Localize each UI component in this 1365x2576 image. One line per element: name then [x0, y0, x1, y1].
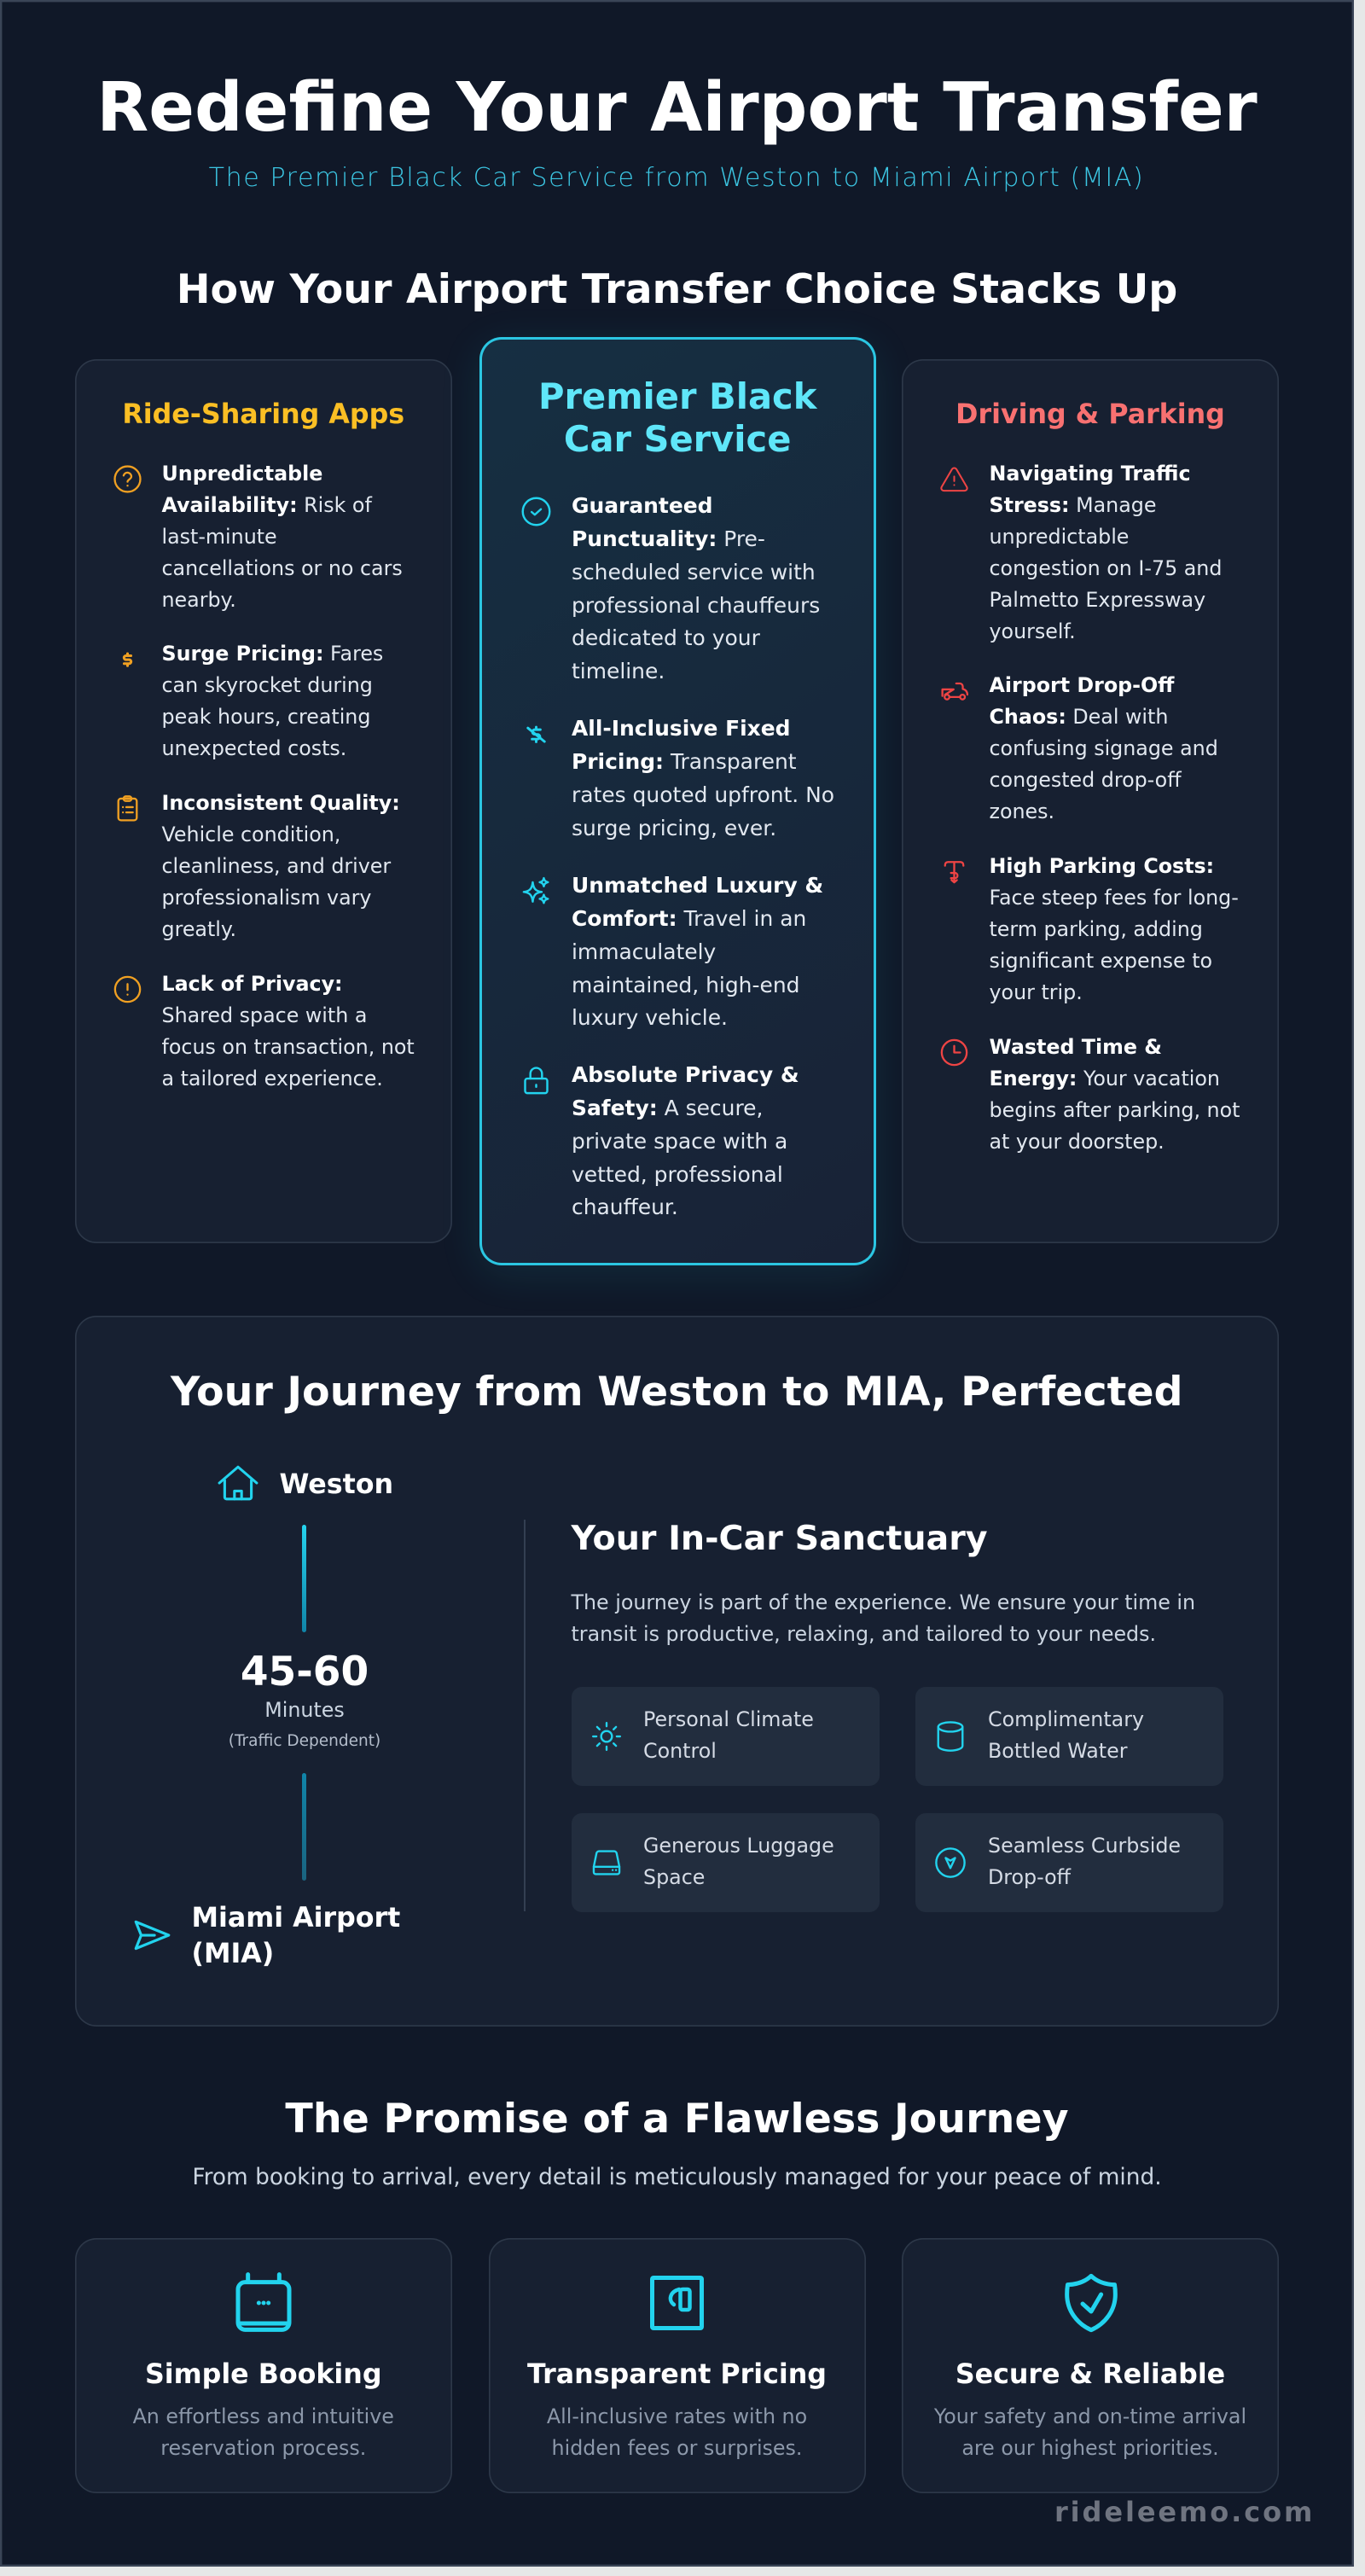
- text: secure and reliable: Your safety and on-time arrival: [934, 2404, 1246, 2428]
- text: guaranteed punctuality: timeline.: [572, 659, 665, 683]
- icon: lock: [524, 1067, 549, 1094]
- text: secure and reliable: are our highest priorities.: [961, 2436, 1219, 2460]
- text: high parking costs: term parking, adding: [990, 917, 1203, 941]
- text: all-inclusive fixed pricing: surge pricing, ever.: [572, 816, 776, 840]
- icon: parking cost sign: [944, 861, 964, 884]
- panel: driving and parking: [902, 359, 1279, 1243]
- text: unmatched luxury: [572, 873, 823, 1030]
- text: unpredictable availability: Unpredictable: [162, 462, 322, 486]
- heading: comparison: How Your Airport Transfer Choice Stacks Up: [177, 266, 1177, 313]
- text: wasted time and energy: Wasted Time &: [990, 1035, 1162, 1059]
- text: simple booking: An effortless and intuitive: [133, 2404, 394, 2428]
- text: navigating traffic stress: yourself.: [990, 619, 1076, 643]
- icon: paper plane: [130, 1914, 172, 1957]
- text: unmatched luxury: maintained, high-end: [572, 973, 799, 997]
- text: wasted time and energy: [990, 1035, 1240, 1154]
- icon: calendar: [229, 2269, 298, 2337]
- card: secure and reliable: [902, 2238, 1279, 2493]
- icon: clock: [940, 1039, 967, 1067]
- text: airport drop-off chaos: Airport Drop-Off: [990, 673, 1174, 697]
- text: unpredictable availability: nearby.: [162, 588, 236, 612]
- text: bottled water: Complimentary: [988, 1707, 1144, 1731]
- panel: journey: [75, 1316, 1279, 2026]
- feature: climate control: [572, 1687, 880, 1786]
- text: absolute privacy: private space with a: [572, 1129, 787, 1154]
- text: all-inclusive fixed pricing: Pricing: Transparent: [572, 749, 797, 774]
- text: absolute privacy: Absolute Privacy &: [572, 1062, 799, 1087]
- icon: slashed dollar: [526, 725, 546, 743]
- panel: premier black car service: [479, 337, 876, 1265]
- text: unmatched luxury: luxury vehicle.: [572, 1005, 728, 1030]
- text: airport drop-off chaos: zones.: [990, 800, 1054, 823]
- title: transparent pricing: Transparent Pricing: [527, 2359, 827, 2390]
- text: inconsistent quality: cleanliness, and driver: [162, 854, 391, 878]
- text: guaranteed punctuality: [572, 493, 820, 683]
- line: route upper: [302, 1525, 306, 1632]
- text: unpredictable availability: last-minute: [162, 525, 277, 549]
- text: guaranteed punctuality: scheduled service with: [572, 560, 816, 584]
- card: transparent pricing: [488, 2238, 865, 2493]
- text: luggage space: Space: [643, 1865, 705, 1889]
- text: unmatched luxury: Comfort: Travel in an: [572, 906, 806, 931]
- icon: tablet with mug: [643, 2269, 712, 2337]
- text: luggage space: Generous Luggage: [643, 1834, 834, 1858]
- text: airport drop-off chaos: Chaos: Deal with: [990, 705, 1168, 729]
- icon: sun: [590, 1720, 623, 1753]
- text: climate control: Control: [643, 1739, 717, 1763]
- route timeline: [135, 1466, 400, 1969]
- item: inconsistent quality: [118, 791, 400, 941]
- text: lack of privacy: [162, 972, 415, 1090]
- item: surge pricing: [123, 642, 383, 760]
- text: guaranteed punctuality: Guaranteed: [572, 493, 713, 518]
- text: lack of privacy: Shared space with a: [162, 1003, 367, 1027]
- label: Miami Airport: [191, 1900, 400, 1972]
- note: traffic dependent: (Traffic Dependent): [229, 1732, 380, 1750]
- feature: curbside drop-off: [915, 1813, 1223, 1912]
- line: route lower: [302, 1773, 306, 1881]
- text: unpredictable availability: [162, 462, 403, 612]
- text: airport drop-off chaos: congested drop-off: [990, 768, 1182, 792]
- text: simple booking: reservation process.: [160, 2436, 366, 2460]
- text: absolute privacy: Safety: A secure,: [572, 1096, 763, 1120]
- item: airport drop-off chaos: [941, 673, 1218, 823]
- title: Redefine Your Airport Transfer: [96, 67, 1258, 147]
- text: absolute privacy: chauffeur.: [572, 1195, 678, 1219]
- heading: journey: Your Journey from Weston to MIA, Perfected: [171, 1369, 1183, 1416]
- feature: bottled water: [915, 1687, 1223, 1786]
- text: airport drop-off chaos: [990, 673, 1218, 823]
- panel: ride-sharing apps: [75, 359, 452, 1243]
- text: inconsistent quality: Inconsistent Quality:: [162, 791, 400, 815]
- item: navigating traffic stress: [940, 462, 1222, 643]
- item: unmatched luxury: [522, 873, 823, 1030]
- text: all-inclusive fixed pricing: [572, 716, 834, 840]
- text: unpredictable availability: cancellations or no cars: [162, 556, 403, 580]
- text: in-car intro: The journey is part of the experience. We ensure your time in: [572, 1590, 1195, 1614]
- label: minutes: Minutes: [264, 1698, 345, 1722]
- heading: ride-sharing apps: Ride-Sharing Apps: [122, 399, 404, 430]
- card: simple booking: [75, 2238, 452, 2493]
- text: surge pricing: Surge Pricing: Fares: [162, 642, 383, 666]
- text: navigating traffic stress: Palmetto Expressway: [990, 588, 1205, 612]
- text: lack of privacy: a tailored experience.: [162, 1067, 383, 1090]
- item: guaranteed punctuality: [522, 493, 820, 683]
- text: bottled water: Bottled Water: [988, 1739, 1128, 1763]
- text: guaranteed punctuality: professional chauffeurs: [572, 593, 820, 618]
- text: absolute privacy: vetted, professional: [572, 1162, 783, 1187]
- text: bottled water: [988, 1704, 1144, 1767]
- text: guaranteed punctuality: dedicated to your: [572, 625, 760, 650]
- icon: storage drive: [590, 1846, 623, 1879]
- text: navigating traffic stress: unpredictable: [990, 525, 1129, 549]
- text: high parking costs: [990, 854, 1239, 1004]
- icon: cylinder: [934, 1720, 967, 1753]
- icon: clipboard: [118, 795, 138, 821]
- text: inconsistent quality: professionalism vary: [162, 886, 372, 910]
- heading: driving and parking: Driving & Parking: [956, 399, 1225, 430]
- icon: home: [218, 1466, 258, 1500]
- item: lack of privacy: [114, 972, 415, 1090]
- text: secure and reliable: [902, 2401, 1279, 2464]
- item: wasted time and energy: [940, 1035, 1240, 1154]
- item: unpredictable availability: [113, 462, 403, 612]
- text: surge pricing: can skyrocket during: [162, 673, 373, 697]
- text: lack of privacy: Lack of Privacy:: [162, 972, 343, 996]
- icon: question circle: [113, 465, 142, 493]
- icon: warning triangle: [940, 468, 968, 491]
- text: surge pricing: [162, 642, 383, 760]
- text: in-car intro: [572, 1587, 1195, 1650]
- text: wasted time and energy: at your doorstep.: [990, 1130, 1165, 1154]
- text: unmatched luxury: Unmatched Luxury &: [572, 873, 823, 898]
- text: in-car intro: transit is productive, relaxing, and tailored to your needs.: [572, 1622, 1156, 1646]
- text: navigating traffic stress: [990, 462, 1222, 643]
- text: high parking costs: Face steep fees for long-: [990, 886, 1239, 910]
- text: transparent pricing: All-inclusive rates with no: [547, 2404, 807, 2428]
- text: navigating traffic stress: Stress: Manage: [990, 493, 1156, 517]
- label: Miami Airport: Miami Airport: [191, 1903, 400, 1933]
- icon: chevron circle: [934, 1846, 967, 1879]
- text: guaranteed punctuality: Punctuality: Pre-: [572, 526, 765, 551]
- text: simple booking: [75, 2401, 452, 2464]
- item: all-inclusive fixed pricing: [526, 716, 834, 840]
- text: surge pricing: peak hours, creating: [162, 705, 370, 729]
- icon: shield check: [1056, 2269, 1124, 2337]
- icon: dollar: [123, 652, 133, 667]
- heading: premier black car service: Premier Black: [538, 375, 816, 416]
- label: Miami Airport: (MIA): [191, 1939, 274, 1969]
- text: lack of privacy: focus on transaction, not: [162, 1035, 415, 1059]
- text: inconsistent quality: Vehicle condition,: [162, 823, 340, 846]
- text: surge pricing: unexpected costs.: [162, 736, 346, 760]
- watermark: rideleemo.com: [1054, 2496, 1315, 2528]
- heading: in-car sanctuary: Your In-Car Sanctuary: [572, 1519, 988, 1558]
- text: high parking costs: High Parking Costs:: [990, 854, 1214, 878]
- text: inconsistent quality: [162, 791, 400, 941]
- text: wasted time and energy: begins after parking, not: [990, 1098, 1240, 1122]
- number: 45-60: 45-60: [241, 1649, 369, 1695]
- text: unmatched luxury: immaculately: [572, 939, 716, 964]
- text: transparent pricing: [488, 2401, 865, 2464]
- heading: premier black car service: [538, 375, 817, 459]
- label: Weston: Weston: [280, 1469, 393, 1500]
- heading: premier black car service: Car Service: [564, 418, 791, 459]
- icon: car with route: [941, 683, 969, 701]
- text: curbside drop-off: Drop-off: [988, 1865, 1071, 1889]
- duration: [229, 1649, 380, 1750]
- text: climate control: [643, 1704, 814, 1767]
- text: high parking costs: significant expense to: [990, 949, 1212, 973]
- title: secure and reliable: Secure & Reliable: [956, 2359, 1225, 2390]
- heading: promise: The Promise of a Flawless Journey: [285, 2096, 1069, 2143]
- text: unpredictable availability: Availability: Risk of: [162, 493, 372, 517]
- text: all-inclusive fixed pricing: rates quoted upfront. No: [572, 782, 834, 807]
- text: airport drop-off chaos: confusing signage and: [990, 736, 1218, 760]
- icon: check circle: [522, 497, 551, 526]
- text: absolute privacy: [572, 1062, 799, 1219]
- text: navigating traffic stress: Navigating Traffic: [990, 462, 1191, 486]
- item: absolute privacy: [524, 1062, 799, 1219]
- text: transparent pricing: hidden fees or surprises.: [552, 2436, 802, 2460]
- feature: luggage space: [572, 1813, 880, 1912]
- subtitle: The Premier Black Car Service from Weston to Miami Airport (MIA): [209, 163, 1144, 193]
- icon: alert circle: [114, 976, 142, 1003]
- text: climate control: Personal Climate: [643, 1707, 814, 1731]
- text: high parking costs: your trip.: [990, 980, 1083, 1004]
- item: high parking costs: [944, 854, 1239, 1004]
- icon: sparkles: [522, 877, 549, 904]
- text: curbside drop-off: Seamless Curbside: [988, 1834, 1181, 1858]
- text: wasted time and energy: Energy: Your vacation: [990, 1067, 1220, 1090]
- text: promise subtitle: From booking to arrival, every detail is meticulously managed for your peace of mind.: [192, 2164, 1162, 2190]
- text: curbside drop-off: [988, 1830, 1181, 1893]
- text: navigating traffic stress: congestion on I-75 and: [990, 556, 1222, 580]
- divider: [524, 1520, 526, 1911]
- title: simple booking: Simple Booking: [145, 2359, 382, 2390]
- text: all-inclusive fixed pricing: All-Inclusive Fixed: [572, 716, 791, 741]
- text: luggage space: [643, 1830, 834, 1893]
- text: inconsistent quality: greatly.: [162, 917, 236, 941]
